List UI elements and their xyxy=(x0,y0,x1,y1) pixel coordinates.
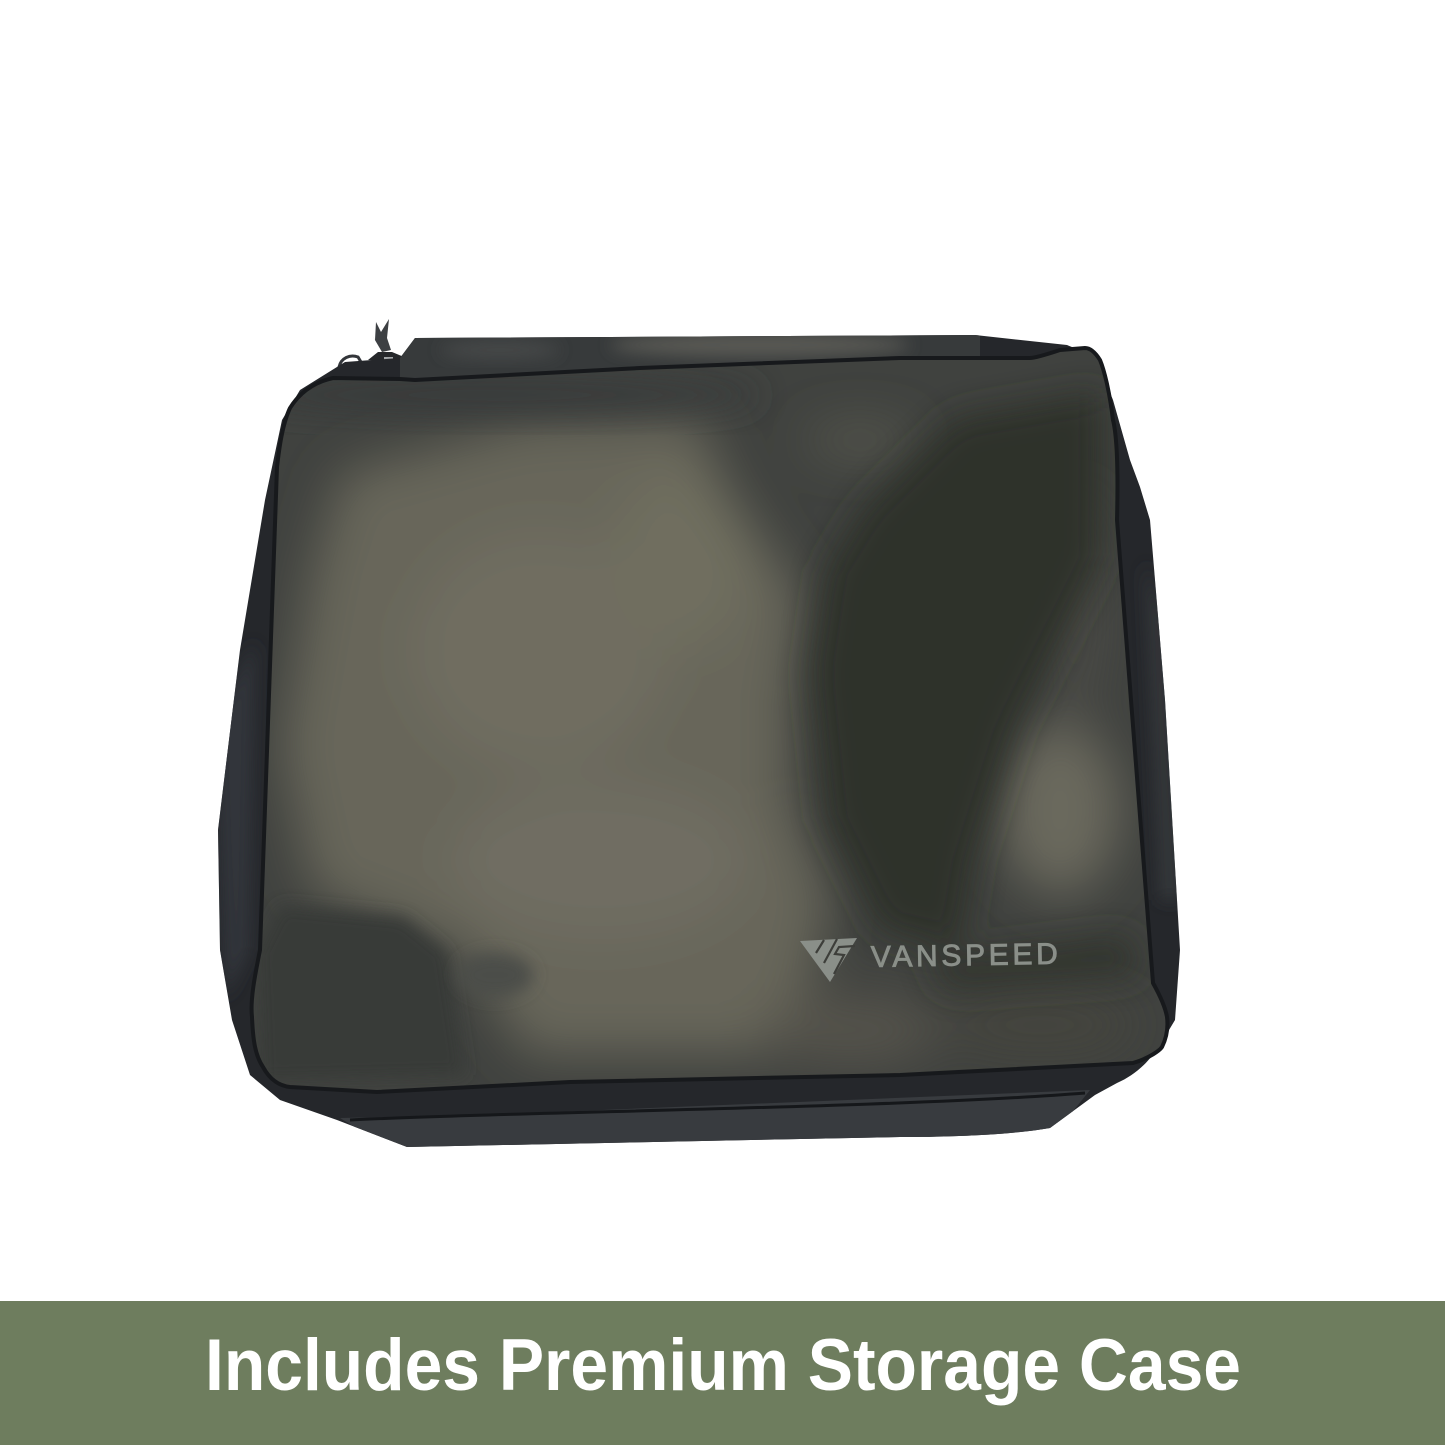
case outer body xyxy=(200,320,1200,1160)
zipper pull xyxy=(339,319,404,367)
logo wordmark: VANSPEED xyxy=(871,938,1058,974)
caption banner xyxy=(0,1301,1445,1445)
bottom-left shadow xyxy=(266,906,454,1072)
right side mesh xyxy=(1146,577,1178,904)
caption text: Includes Premium Storage Case xyxy=(205,1325,1241,1406)
front panel with shading xyxy=(240,340,1190,1100)
left side mesh xyxy=(218,656,254,993)
lower case fold xyxy=(340,1090,1090,1147)
logo mark xyxy=(800,938,857,982)
zipper piping around the panel xyxy=(252,348,1167,1092)
product photo: storage case xyxy=(200,319,1200,1160)
diagonal shadow xyxy=(810,391,1140,990)
top flap xyxy=(400,335,980,378)
infographic canvas xyxy=(0,319,1445,1445)
soft highlight area xyxy=(281,417,1140,1065)
top shadow band xyxy=(444,384,706,426)
